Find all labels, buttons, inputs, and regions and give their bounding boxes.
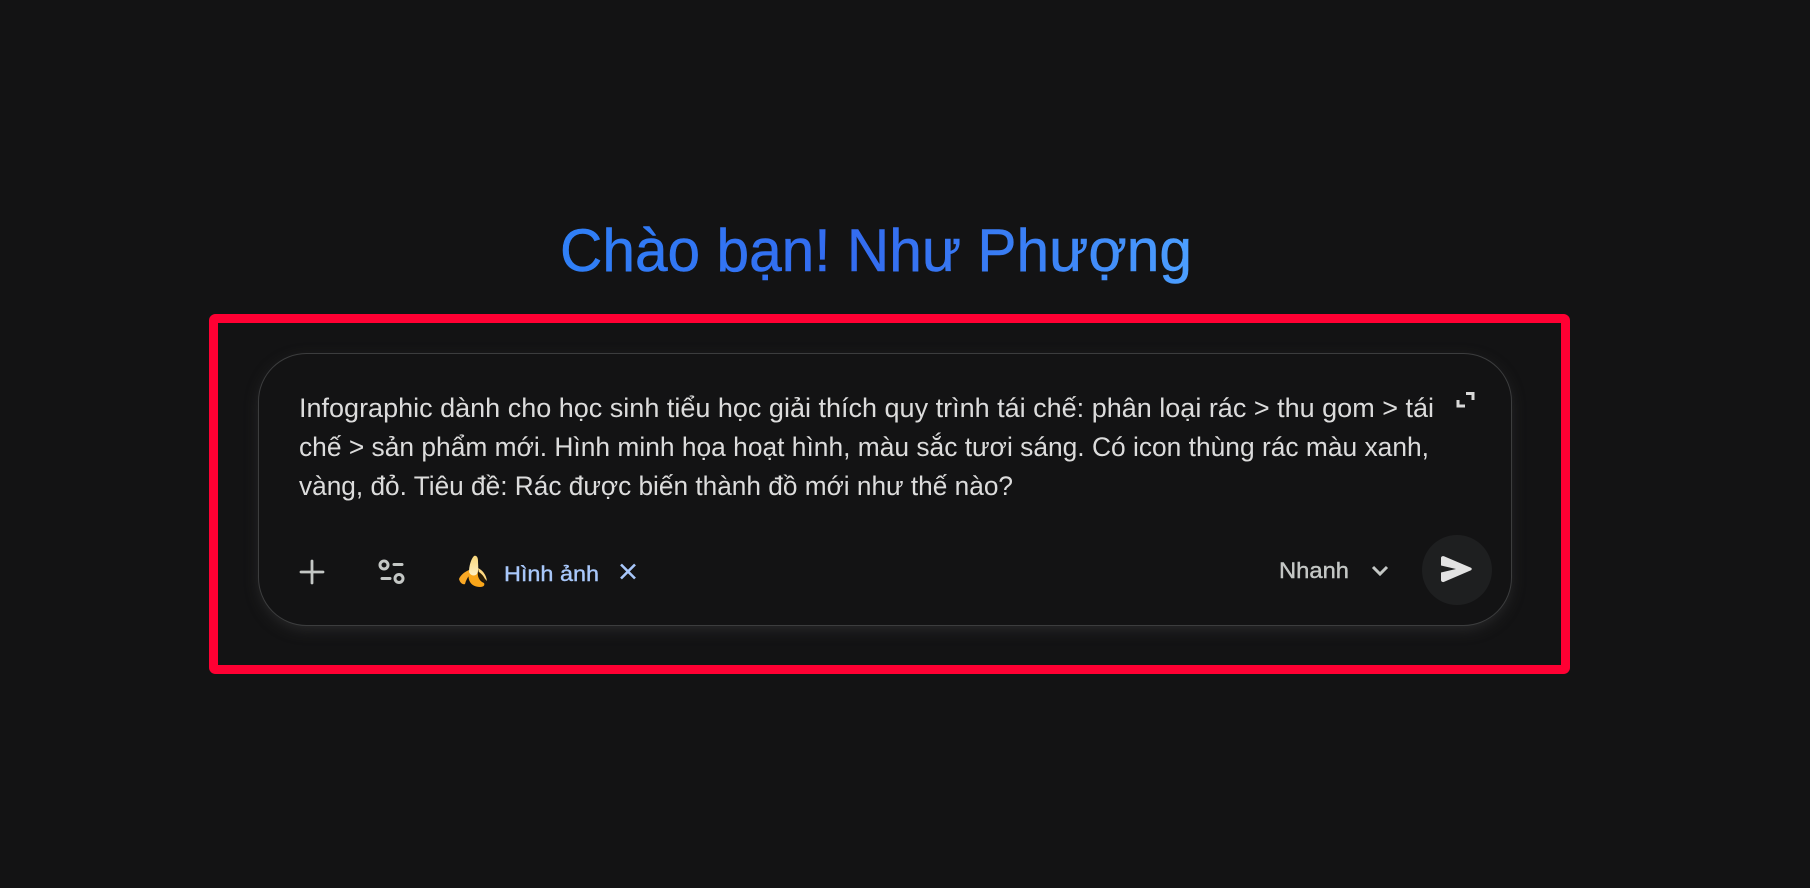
icon: chip close: [621, 564, 635, 578]
card outline: [258, 354, 1512, 626]
icon: banana: [459, 556, 487, 587]
icon: send arrow: [1441, 556, 1472, 582]
prompt text block: vàng, đỏ. Tiêu đề: Rác được biến thành đồ mới như thế nào?: [299, 471, 1013, 501]
model selector label: Nhanh: [1279, 558, 1349, 583]
panel: prompt input card: [258, 354, 1512, 629]
prompt text block: chế > sản phẩm mới. Hình minh họa hoạt hình, màu sắc tươi sáng. Có icon thùng rác màu xanh,: [299, 432, 1429, 462]
icon: chevron: [1373, 567, 1387, 574]
tool chip label: Hình ảnh: [504, 562, 599, 586]
send button: [1422, 535, 1492, 605]
title: greeting: Chào bạn! Như Phượng: [560, 217, 1192, 284]
icon: tool sliders: [380, 561, 403, 582]
card glow: [260, 359, 1510, 629]
red highlight frame: [214, 318, 1566, 670]
icon: plus: [301, 561, 323, 583]
prompt text block: [299, 393, 1434, 501]
icon: expand: [1458, 394, 1473, 406]
prompt text block: Infographic dành cho học sinh tiểu học giải thích quy trình tái chế: phân loại rác > thu gom > tái: [299, 393, 1434, 423]
